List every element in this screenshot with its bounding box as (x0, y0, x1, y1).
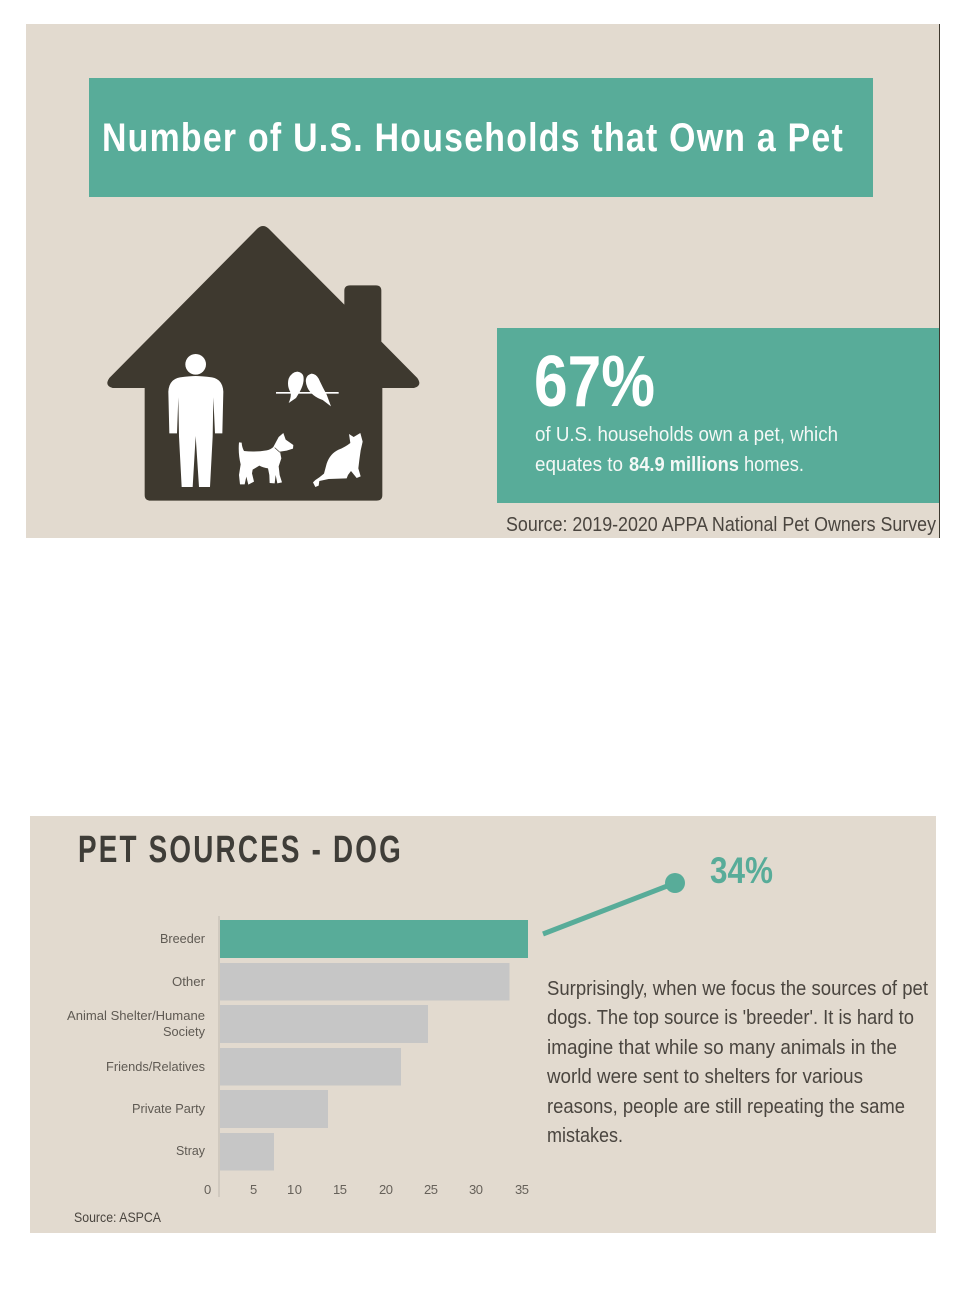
category labels: Other (172, 974, 206, 989)
icon: house with person and pets (107, 226, 419, 501)
icon: two birds on a wire (276, 372, 339, 406)
category labels: Animal Shelter/Humane (67, 1008, 205, 1023)
source note: ASPCA: Source: ASPCA (74, 1209, 162, 1225)
icon: person (168, 354, 223, 487)
category labels (67, 931, 206, 1158)
x axis labels: 15 (333, 1182, 347, 1197)
callout text: equates to (535, 454, 623, 476)
category labels: Stray (176, 1143, 205, 1158)
category labels: Friends/Relatives (106, 1059, 205, 1074)
title banner: Number of U.S. Households that Own a Pet (102, 116, 844, 160)
statistic: 67%: 67% (534, 342, 655, 422)
commentary text: mistakes. (547, 1125, 623, 1147)
commentary text: world were sent to shelters for various (546, 1066, 863, 1088)
callout text: homes. (744, 454, 804, 476)
commentary text: imagine that while so many animals in the (547, 1037, 897, 1059)
icon: house silhouette (107, 226, 419, 501)
icon: cat (313, 433, 363, 487)
category labels: Private Party (132, 1101, 205, 1116)
x axis labels: 0 (204, 1182, 211, 1197)
callout: 67 percent (497, 328, 939, 503)
x axis labels: 35 (515, 1182, 529, 1197)
commentary text: Surprisingly, when we focus the sources of pet (547, 978, 928, 1000)
x axis labels: 20 (379, 1182, 393, 1197)
callout text: 84.9 millions (629, 454, 739, 476)
panel: household pet ownership (26, 24, 940, 538)
title banner (89, 78, 873, 197)
heading: PET SOURCES - DOG (78, 829, 403, 871)
icon: dog (239, 433, 293, 485)
bars (220, 920, 528, 1170)
x axis labels: 5 (250, 1182, 257, 1197)
panel: pet sources dog (30, 816, 936, 1233)
commentary text (546, 978, 928, 1147)
commentary text: reasons, people are still repeating the same (547, 1096, 905, 1118)
category labels: Breeder (160, 931, 206, 946)
x axis labels (204, 1182, 529, 1197)
bar chart (67, 916, 529, 1197)
statistic: 34%: 34% (710, 850, 773, 891)
commentary text: dogs. The top source is 'breeder'. It is hard to (547, 1007, 914, 1029)
category labels: Society (163, 1024, 205, 1039)
x axis labels: 25 (424, 1182, 438, 1197)
leader line to breeder bar (543, 873, 685, 934)
callout text: of U.S. households own a pet, which (535, 424, 838, 446)
callout text (535, 424, 838, 476)
x axis labels: 30 (469, 1182, 483, 1197)
x axis labels: 10 (287, 1182, 302, 1197)
